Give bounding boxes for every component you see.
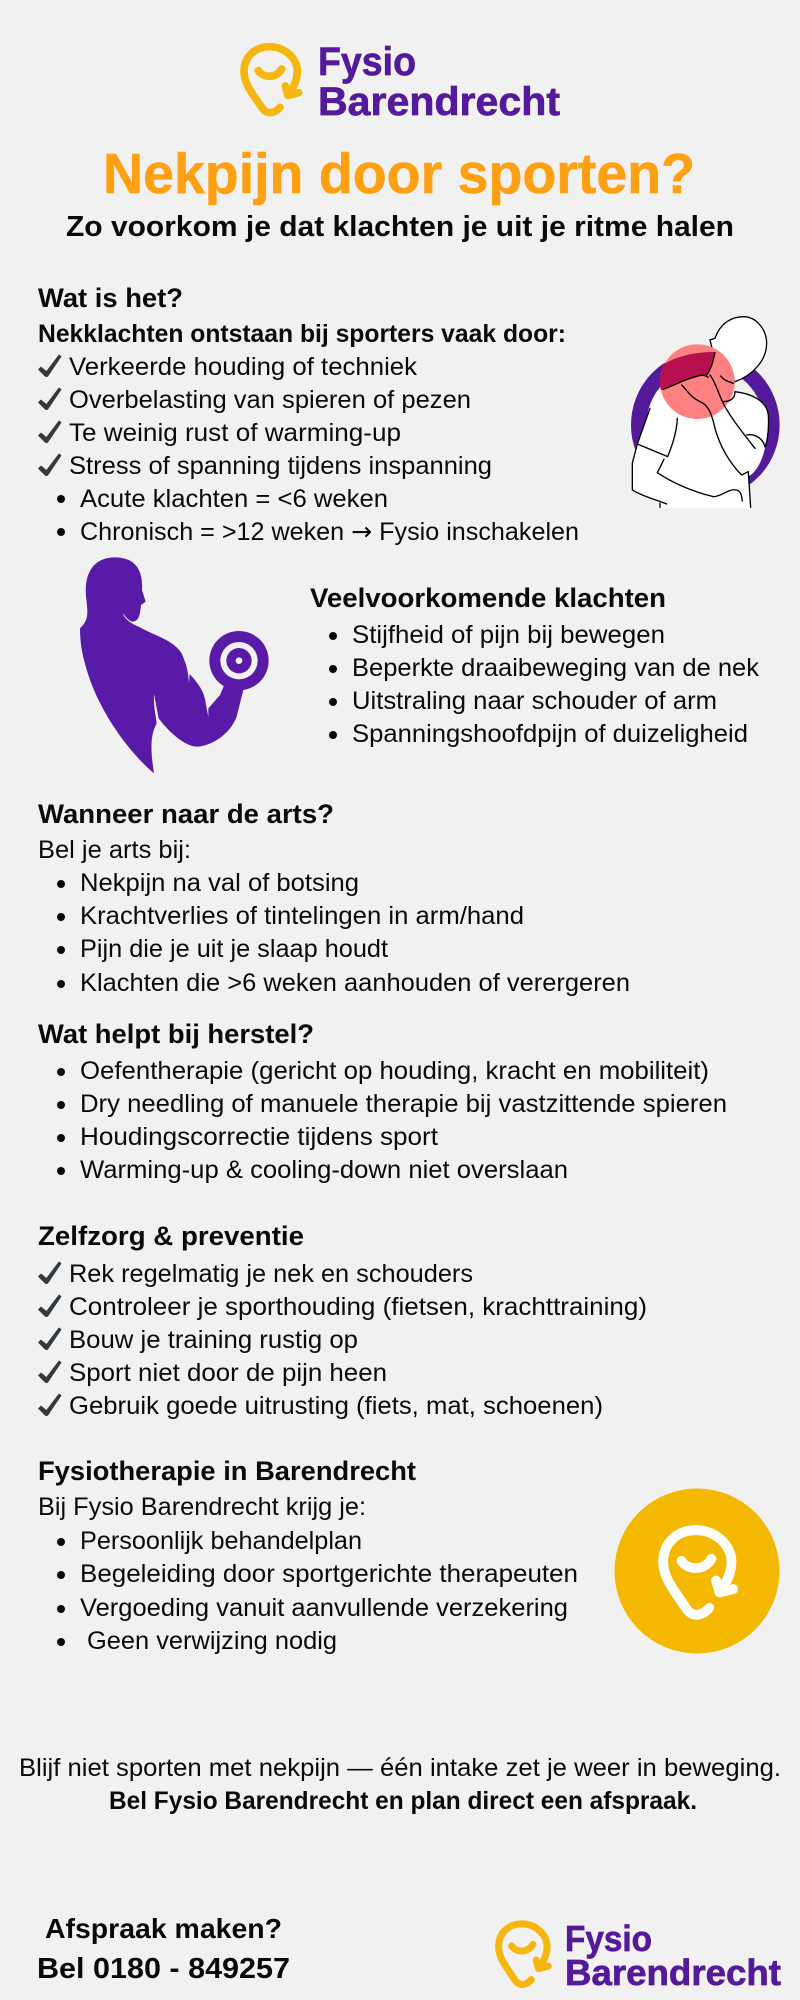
head <box>710 317 767 382</box>
bullet list: complaints: Stijfheid of pijn bij bewegen <box>352 621 665 649</box>
heading: Wat is het? <box>38 283 183 313</box>
intro line: Bel je arts bij: <box>38 836 191 864</box>
bullet list: complaints: Spanningshoofdpijn of duizeligheid <box>352 720 748 748</box>
checklist: self care: Gebruik goede uitrusting (fiets, mat, schoenen) <box>69 1392 603 1420</box>
subtitle: Zo voorkom je dat klachten je uit je ritme halen <box>66 211 734 243</box>
bullet list: benefits: Vergoeding vanuit aanvullende verzekering <box>80 1594 568 1622</box>
purple ring <box>639 358 772 492</box>
bullet list: red flags: Nekpijn na val of botsing <box>80 869 359 897</box>
icon: yellow circle with logo <box>614 1488 780 1654</box>
checklist: self care <box>38 1260 647 1420</box>
logo: Fysio Barendrecht header <box>244 40 560 124</box>
bullet list: treatment: Houdingscorrectie tijdens sport <box>80 1123 438 1151</box>
checklist: causes <box>38 353 492 480</box>
closing call to action: Bel Fysio Barendrecht en plan direct een afspraak. <box>109 1787 697 1815</box>
closing call to action: Blijf niet sporten met nekpijn — één intake zet je weer in beweging. <box>19 1754 781 1782</box>
bullet list: duration <box>57 485 579 546</box>
logo wordmark <box>318 40 560 124</box>
pain circle <box>660 344 735 419</box>
heading: Veelvoorkomende klachten <box>310 583 666 613</box>
checklist: self care: Controleer je sporthouding (fietsen, krachttraining) <box>69 1293 647 1321</box>
heading: Fysiotherapie in Barendrecht <box>38 1456 416 1486</box>
closing call to action <box>19 1754 781 1815</box>
icon: logo ear <box>244 47 299 113</box>
logo wordmark: Fysio <box>318 40 416 84</box>
contact block <box>37 1913 290 1985</box>
panel: zelfzorg en preventie <box>38 1221 647 1420</box>
bullet list: red flags: Klachten die >6 weken aanhouden of verergeren <box>80 969 630 997</box>
checklist: self care: Sport niet door de pijn heen <box>69 1359 387 1387</box>
bullet list: complaints: Beperkte draaibeweging van de nek <box>352 654 760 682</box>
checklist: causes: Stress of spanning tijdens inspanning <box>69 452 492 480</box>
heading: Wanneer naar de arts? <box>38 799 334 829</box>
bullet list: duration: Chronisch = >12 weken → Fysio inschakelen <box>80 517 579 546</box>
bullet list: complaints <box>329 621 760 748</box>
icon: athlete with dumbbell <box>80 557 269 773</box>
checklist: self care: Bouw je training rustig op <box>69 1326 358 1354</box>
contact block: Bel 0180 - 849257 <box>37 1953 290 1985</box>
bullet list: duration: Acute klachten = <6 weken <box>80 485 388 513</box>
icon: logo ear footer <box>499 1924 548 1985</box>
bullet list: red flags: Krachtverlies of tintelingen in arm/hand <box>80 902 524 930</box>
title: Nekpijn door sporten? <box>103 142 695 206</box>
body <box>632 353 768 508</box>
checklist: causes: Verkeerde houding of techniek <box>69 353 418 381</box>
panel: wanneer naar de arts <box>38 799 630 997</box>
footer wordmark: Barendrecht <box>565 1952 781 1993</box>
bullet list: benefits: Geen verwijzing nodig <box>87 1627 337 1655</box>
footer wordmark: Fysio <box>565 1918 652 1959</box>
figure lines <box>632 353 769 507</box>
bullet list: treatment <box>57 1057 727 1184</box>
bullet list: red flags <box>57 869 630 997</box>
bullet list: benefits: Persoonlijk behandelplan <box>80 1527 362 1555</box>
silhouette <box>80 557 243 773</box>
bullet list: red flags: Pijn die je uit je slaap houdt <box>80 935 388 963</box>
panel: veelvoorkomende klachten <box>310 583 760 748</box>
dumbbell <box>209 631 269 690</box>
bullet list: complaints: Uitstraling naar schouder of arm <box>352 687 717 715</box>
icon: man with neck pain <box>632 317 772 508</box>
intro line: Bij Fysio Barendrecht krijg je: <box>38 1493 366 1521</box>
pain overlap <box>660 352 715 390</box>
heading: Zelfzorg & preventie <box>38 1221 304 1251</box>
checklist: causes: Te weinig rust of warming-up <box>69 419 401 447</box>
logo: footer <box>499 1918 781 1993</box>
panel: wat is het <box>38 283 579 546</box>
intro line: Nekklachten ontstaan bij sporters vaak door: <box>38 320 566 348</box>
footer wordmark <box>565 1918 781 1993</box>
checklist: causes: Overbelasting van spieren of pezen <box>69 386 471 414</box>
bullet list: treatment: Warming-up & cooling-down niet overslaan <box>80 1156 568 1184</box>
panel: fysiotherapie in barendrecht <box>38 1456 578 1655</box>
heading: Wat helpt bij herstel? <box>38 1019 314 1049</box>
bullet list: treatment: Oefentherapie (gericht op houding, kracht en mobiliteit) <box>80 1057 709 1085</box>
bullet list: treatment: Dry needling of manuele therapie bij vastzittende spieren <box>80 1090 727 1118</box>
checklist: self care: Rek regelmatig je nek en schouders <box>69 1260 473 1288</box>
panel: wat helpt bij herstel <box>38 1019 727 1184</box>
bullet list: benefits <box>57 1527 578 1655</box>
logo wordmark: Barendrecht <box>318 80 560 124</box>
contact block: Afspraak maken? <box>45 1913 282 1944</box>
bullet list: benefits: Begeleiding door sportgerichte therapeuten <box>80 1560 578 1588</box>
